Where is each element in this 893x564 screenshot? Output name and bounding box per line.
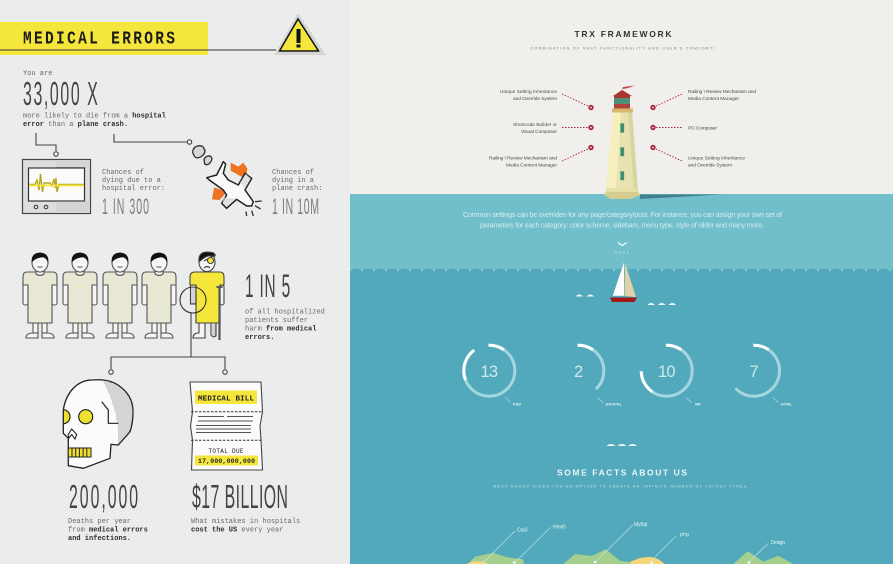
statistic: deaths: and infections.: [68, 535, 131, 543]
text: plane odds: 1 IN 10M: [272, 194, 319, 219]
connector: to monitor: [36, 133, 58, 156]
intro statistic: 33,000 X: [23, 77, 98, 113]
gauge: PSD 13: [464, 345, 521, 406]
feature labels: left: Visual Composer: [521, 129, 557, 135]
statistic: cost: What mistakes in hospitals: [191, 518, 300, 526]
paragraph: parameters for each category: color scheme, sidebars, menu type, style of slider and many more.: [480, 220, 764, 230]
connector: split to skull and bill: [109, 313, 227, 374]
statistic: one in five: patients suffer: [245, 317, 308, 325]
statistic: deaths: [68, 480, 148, 543]
gauge: HTML 7: [728, 345, 793, 406]
statistic: deaths: from medical errors: [68, 526, 148, 534]
gauge: WP 10: WP: [695, 402, 701, 406]
paragraph: Common settings can be overriden for any page/category/post. For instance, you can assign your own set of: [463, 210, 782, 219]
statistic: cost: $17 BILLION: [192, 480, 288, 516]
feature labels: right: Media Content Manager: [688, 96, 739, 102]
gauge: WP 10: [641, 345, 701, 406]
icon: sailboat: [610, 262, 637, 302]
heading: some facts: SOME FACTS ABOUT US: [557, 468, 687, 478]
lighthouse: [604, 86, 722, 199]
feature labels: right: [688, 89, 756, 168]
title banner: MEDICAL ERRORS: [23, 29, 175, 50]
feature labels: left: Railing \ Review Mechanism and: [489, 156, 557, 162]
panel: medical errors: [0, 0, 350, 564]
heading: some facts: [494, 468, 749, 488]
gauge: PSD 13: 13: [480, 363, 498, 381]
gauge: Drupal 2: 2: [574, 363, 583, 381]
gauge: HTML 7: 7: [750, 363, 759, 381]
mountains chart: php: [680, 532, 689, 538]
gauge: HTML 7: HTML: [781, 402, 793, 406]
mountains chart: Design: [771, 540, 785, 546]
feature labels: right: PO Composer: [688, 126, 717, 132]
small waves near boat: [576, 294, 676, 305]
statistic: one in five: [245, 269, 325, 342]
statistic: one in five: errors.: [245, 334, 274, 342]
gauge: PSD 13: PSD: [513, 402, 521, 406]
injured patient: [180, 252, 224, 340]
icon: medical bill: MEDICAL BILL: [198, 396, 254, 404]
patients row: [23, 253, 176, 338]
mountains chart: [466, 522, 793, 564]
text: hospital odds: hospital error:: [102, 185, 165, 193]
feature labels: left: Shortcode Builder or: [513, 122, 557, 128]
heading: some facts: BOXX GROUP GIVES YOU AN OPTION TO CREATE AN INFINITE NUMBER OF LAYOUT TYPES.: [494, 484, 749, 488]
gauge: Drupal 2: [553, 345, 623, 406]
statistic: cost: cost the US every year: [191, 526, 283, 534]
icon: heart monitor: [22, 160, 90, 214]
statistic: cost: [191, 480, 300, 534]
heading: TRX framework: TRX FRAMEWORK: [574, 29, 672, 39]
text: hospital odds: Chances of: [102, 169, 144, 177]
title banner: [0, 22, 276, 55]
statistic: deaths: 200,000: [69, 480, 138, 516]
connector: to plane: [114, 134, 192, 144]
mountains chart: MySql: [634, 522, 647, 528]
statistic: one in five: harm from medical: [245, 326, 316, 334]
feature labels: right: and Override System: [688, 162, 732, 168]
text: plane odds: Chances of: [272, 169, 314, 177]
feature labels: left: [489, 89, 557, 168]
feature labels: left: Media Content Manager: [506, 162, 557, 168]
icon: chevron more: MORE: [615, 250, 629, 254]
feature labels: right: Railing \ Review Mechanism and: [688, 89, 756, 95]
intro statistic: You are: [23, 70, 52, 78]
heading: TRX framework: [530, 29, 714, 50]
dotted callouts: [562, 94, 682, 161]
statistic: one in five: 1 IN 5: [245, 269, 290, 305]
heading: TRX framework: COMBINATION OF VAST FUNCTIONALITY AND USER'S COMFORT!: [530, 46, 714, 50]
divider icon: three waves: [606, 444, 637, 446]
text: plane odds: plane crash:: [272, 185, 322, 193]
text: hospital odds: 1 IN 300: [102, 194, 149, 219]
feature labels: left: Unique Setting Inheritance: [500, 89, 557, 95]
text: plane odds: [272, 169, 322, 219]
icon: chevron more: [615, 242, 629, 254]
mountains chart: Html5: [553, 524, 566, 530]
icon: medical bill: 17,000,000,000: [198, 458, 255, 465]
feature labels: left: and Override System: [513, 96, 557, 102]
icon: crashing plane: [193, 146, 262, 216]
gauge: WP 10: 10: [658, 363, 676, 381]
feature labels: right: Unique Setting Inheritance: [688, 156, 745, 162]
statistic: one in five: of all hospitalized: [245, 308, 325, 316]
paragraph: [463, 210, 782, 230]
text: hospital odds: dying due to a: [102, 177, 161, 185]
icon: medical bill: [190, 382, 262, 470]
intro statistic: [23, 70, 166, 129]
gauge: Drupal 2: DRUPAL: [606, 402, 623, 406]
icon: medical bill: TOTAL DUE: [208, 448, 244, 455]
intro statistic: more likely to die from a hospital: [23, 112, 166, 120]
statistic: deaths: Deaths per year: [68, 518, 131, 526]
text: plane odds: dying in a: [272, 177, 314, 185]
mountains chart: Css3: [517, 528, 528, 534]
icon: skull: [62, 379, 134, 469]
icon: warning triangle: [274, 13, 326, 55]
intro statistic: error than a plane crash.: [23, 121, 128, 129]
text: hospital odds: [102, 169, 165, 219]
